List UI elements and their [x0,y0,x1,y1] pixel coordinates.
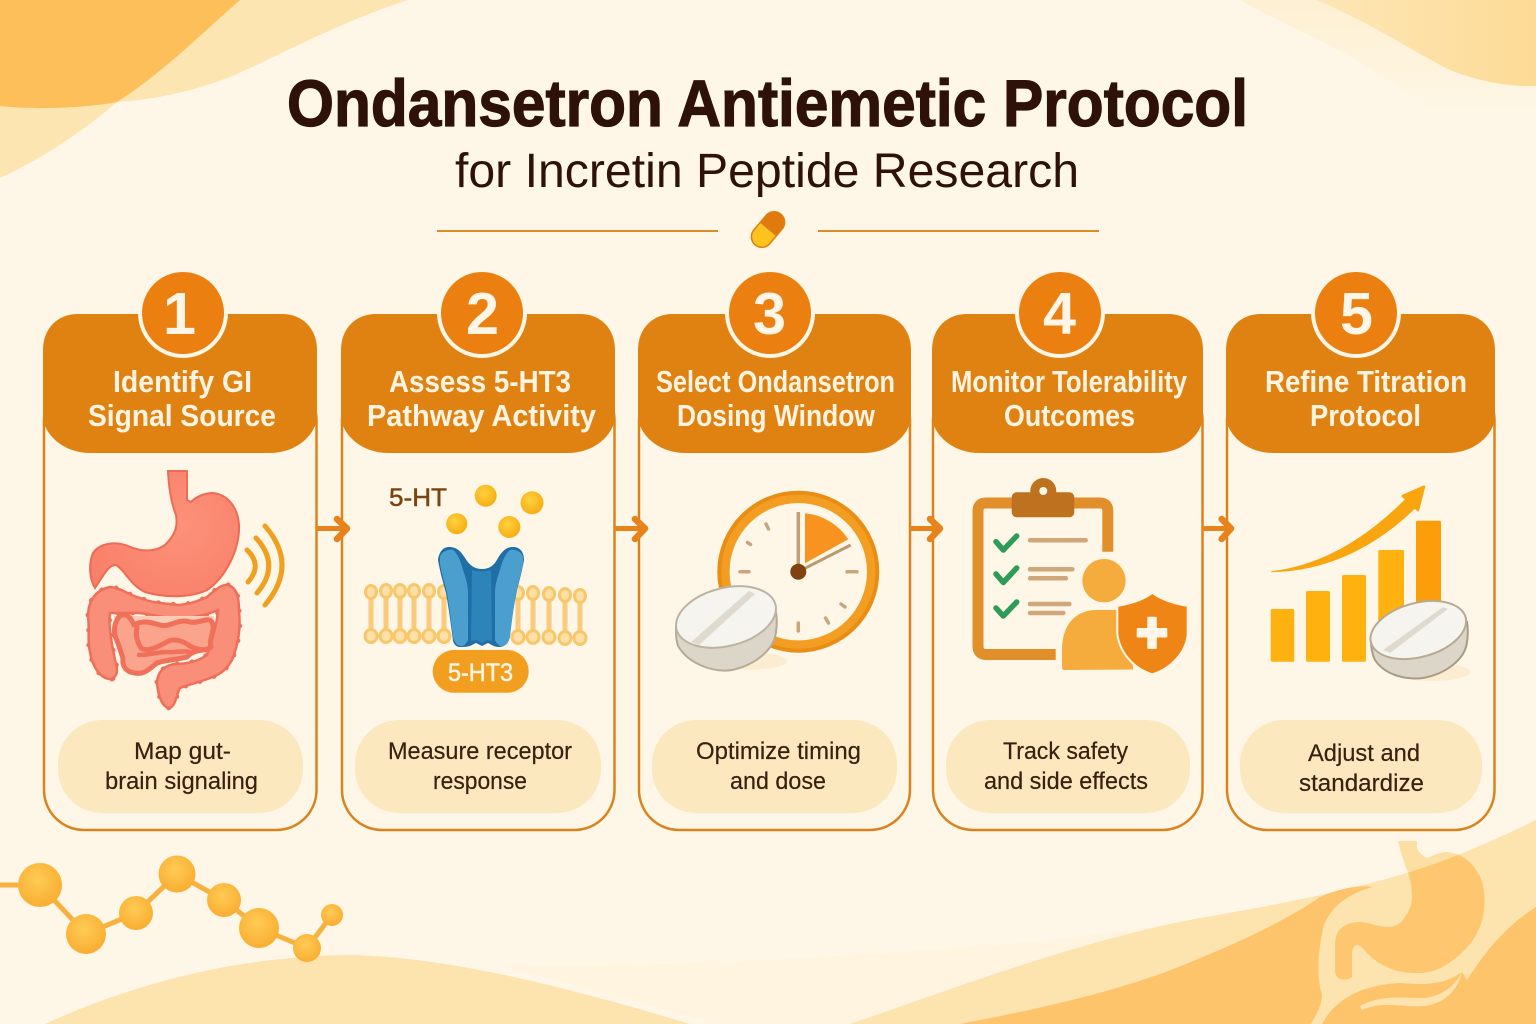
step 1 number badge [138,268,228,358]
icon: clock with tablet [669,491,879,671]
icon: 5-HT3 receptor in membrane [365,484,586,693]
panel: step 4 [932,268,1203,830]
background wave: top right [1240,0,1536,125]
step 2 heading: Assess 5-HT3 [389,364,571,399]
step 4 description: Track safety [1003,738,1129,765]
background wave: top left [0,0,408,178]
subtitle: for Incretin Peptide Research [455,145,1079,198]
step 3 number badge [725,268,815,358]
bar chart [1271,521,1441,662]
step 5 description: standardize [1299,770,1424,797]
step 2 heading: Pathway Activity [367,398,597,433]
step 2 number badge [437,268,527,358]
lipid bilayer [365,584,586,644]
step 2 number badge: 2 [466,281,499,347]
arrow: step 2 to 3 [616,519,645,539]
step 3 heading: Select Ondansetron [656,364,895,399]
rising arrow [1272,487,1424,572]
icon: gut and stomach with signal waves [88,471,282,708]
step 4 header [932,314,1203,453]
step 5 header [1226,314,1495,453]
step 4 heading: Monitor Tolerability [951,364,1188,399]
divider with capsule icon [437,207,1099,252]
step 3 description: and dose [730,768,826,795]
safety shield [1118,594,1187,673]
title: Ondansetron Antiemetic Protocol [287,66,1248,140]
step 1 number badge: 1 [163,281,196,347]
5-HT label: 5-HT [389,484,447,512]
panel: step 1 [43,268,317,830]
step 1 heading: Identify GI [113,364,252,399]
step 5 number badge [1311,268,1401,358]
step 3 description: Optimize timing [696,738,861,765]
panel: step 2 [341,268,615,830]
clipboard [978,478,1108,654]
arrow: step 1 to 2 [318,519,347,539]
step 1 description [58,720,303,813]
step 5 heading: Refine Titration [1265,364,1467,399]
tablet [669,577,787,671]
clock [717,491,879,653]
receptor channel [438,547,524,647]
step 4 heading [951,364,1188,433]
step 5 number badge: 5 [1340,281,1373,347]
step 3 header [638,314,911,453]
step 2 description: response [433,768,527,795]
step 3 description [652,720,897,813]
signal waves [247,526,282,605]
step 5 heading: Protocol [1310,398,1421,433]
step 1 description: Map gut- [134,738,231,765]
step 2 heading [367,364,597,433]
step 4 description [946,720,1190,813]
5-HT3 label pill [433,650,529,693]
step 1 heading [88,364,276,433]
step 5 description [1240,720,1482,813]
tablet [1364,591,1473,681]
5-HT3 label pill: 5-HT3 [448,659,513,687]
arrow: step 3 to 4 [912,519,940,539]
person [1062,555,1133,670]
decorative peptide chain [0,856,343,962]
small intestine [114,615,214,673]
background wave: bottom hill [45,955,690,1024]
step 2 description [355,720,601,813]
step 4 number badge: 4 [1043,281,1076,347]
step 1 description: brain signaling [105,768,258,795]
step 3 heading [656,364,895,433]
panel: step 5 [1226,268,1495,830]
step 2 header [341,314,615,453]
icon: rising bar chart with tablet [1271,487,1473,681]
stomach [90,471,239,596]
colon [88,585,240,708]
step 1 header [43,314,317,453]
step 4 heading: Outcomes [1004,398,1135,433]
step 5 heading [1265,364,1467,433]
step 3 number badge: 3 [753,281,786,347]
panel: step 3 [638,268,911,830]
step 2 description: Measure receptor [388,738,572,765]
step 1 heading: Signal Source [88,398,276,433]
step 4 number badge [1015,268,1105,358]
background wave: bottom right [500,820,1536,1024]
arrow: step 4 to 5 [1204,519,1231,539]
serotonin molecules [446,485,544,538]
step 5 description: Adjust and [1308,740,1420,767]
step 4 description: and side effects [984,768,1148,795]
step 3 heading: Dosing Window [677,398,876,433]
checklist [996,536,1086,616]
icon: clipboard, person and safety shield [978,478,1187,673]
